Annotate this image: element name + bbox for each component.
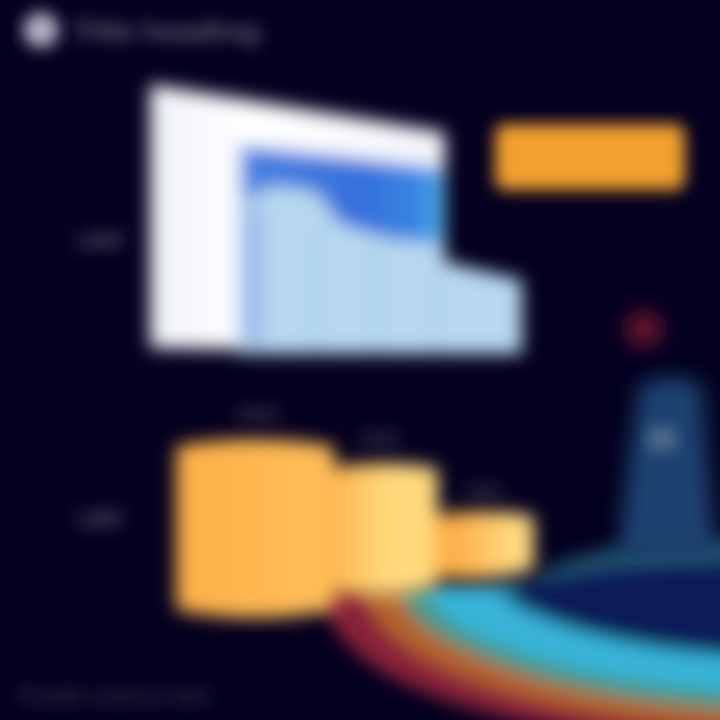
ring: orange [365,585,720,720]
left bar shading [240,205,264,345]
top chart panel [150,84,522,354]
icon: red dot [626,311,662,347]
medium cylinder [330,463,438,596]
value label 3: 00 [466,479,502,504]
large cylinder [176,439,334,618]
dim ring top [530,540,720,640]
outer ring: red [322,585,720,720]
figure highlight [648,428,676,450]
header logo and title [23,12,260,48]
bar separators [312,228,438,352]
rings at bottom right [322,540,720,720]
small cylinder [434,511,534,579]
left label bottom: Label [78,502,122,532]
icon: blue figure [618,378,716,556]
value label 1: 00 [236,402,280,427]
cylinders [176,439,534,618]
blue band [242,145,444,244]
ring: dark navy centre [500,560,720,660]
icon: logo [23,12,59,48]
panel background [150,84,522,354]
footer text: Footer source text [20,683,210,710]
left label top: Label [78,224,122,254]
faint labels above cylinders [236,402,502,504]
orange callout [495,124,685,190]
ring: teal [425,585,720,694]
figure body [618,378,716,556]
ring: green [400,585,720,712]
header title: Title heading [72,16,260,46]
value label 2: 00 [360,427,400,452]
bars base [238,146,522,354]
